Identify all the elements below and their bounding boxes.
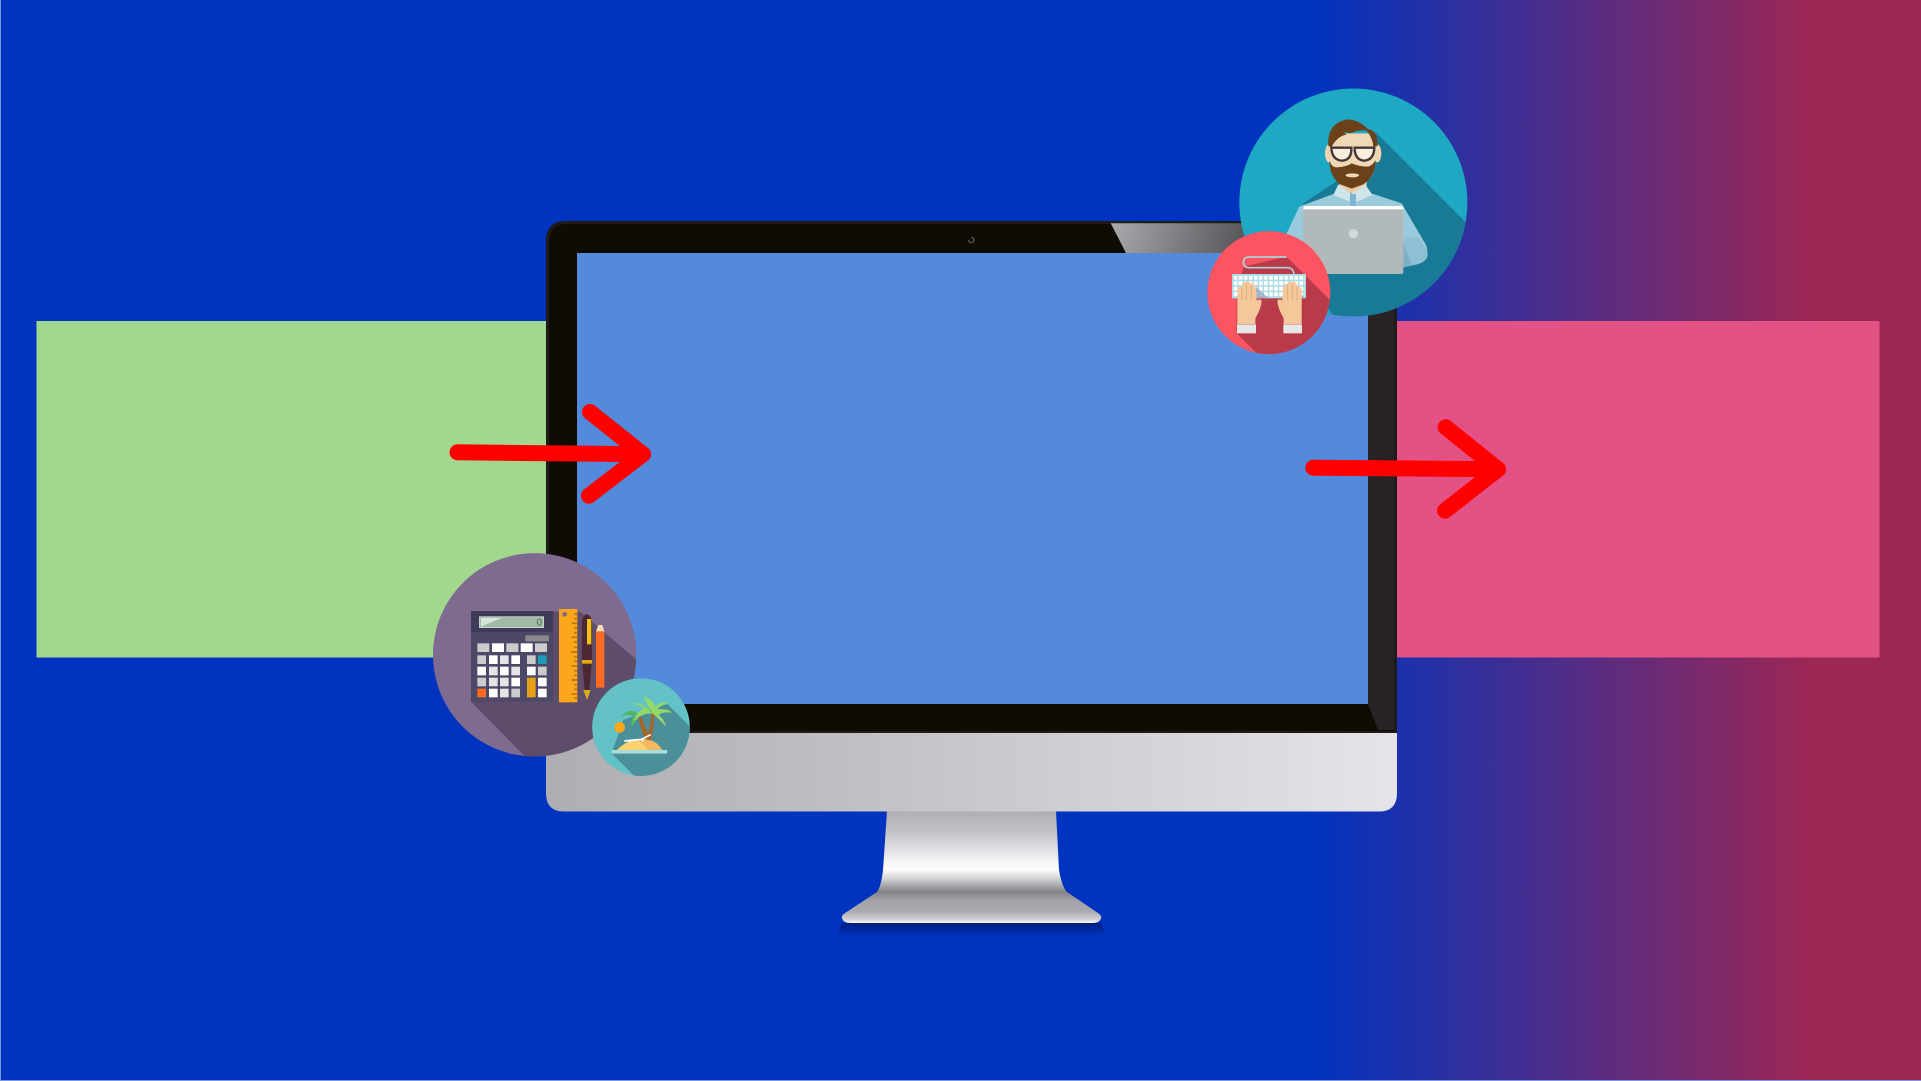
keyboard [1232,274,1306,298]
island sand [617,739,662,750]
monitor stand [836,811,1107,936]
right hand [1277,281,1302,324]
shirt [1287,194,1427,270]
monitor [546,221,1397,936]
neck and collar [1339,177,1367,194]
icon: developer with laptop [1239,88,1473,330]
right bezel panel [1368,224,1394,730]
left hand [1237,281,1262,324]
glasses [1331,148,1374,161]
island base [612,750,667,754]
laptop [1303,206,1403,274]
icon: hands on keyboard [1207,231,1337,360]
calculator: 0 [537,618,543,629]
arrow: out of monitor [1313,427,1498,511]
pen [582,614,592,700]
pink panel [1396,321,1880,658]
cuffs [1237,324,1302,333]
monitor bezel [546,221,1397,733]
monitor chin [546,732,1397,812]
screen glare [1111,223,1260,253]
beard [1329,160,1375,189]
palm trunks [639,717,650,739]
sun [614,722,625,733]
cable [1243,257,1294,275]
pencil [596,623,604,688]
ruler [559,609,577,702]
icon: calculator and stationery [433,553,647,767]
ears [1325,144,1333,162]
calculator [471,611,553,702]
face [1331,133,1375,185]
hair [1328,120,1378,147]
screen [577,253,1368,704]
green panel [36,321,546,658]
arrow: into monitor [458,412,643,496]
lounge chair [624,735,651,742]
palm leaves [621,711,640,727]
webcam [969,237,974,243]
icon: palm tree island [592,678,697,780]
